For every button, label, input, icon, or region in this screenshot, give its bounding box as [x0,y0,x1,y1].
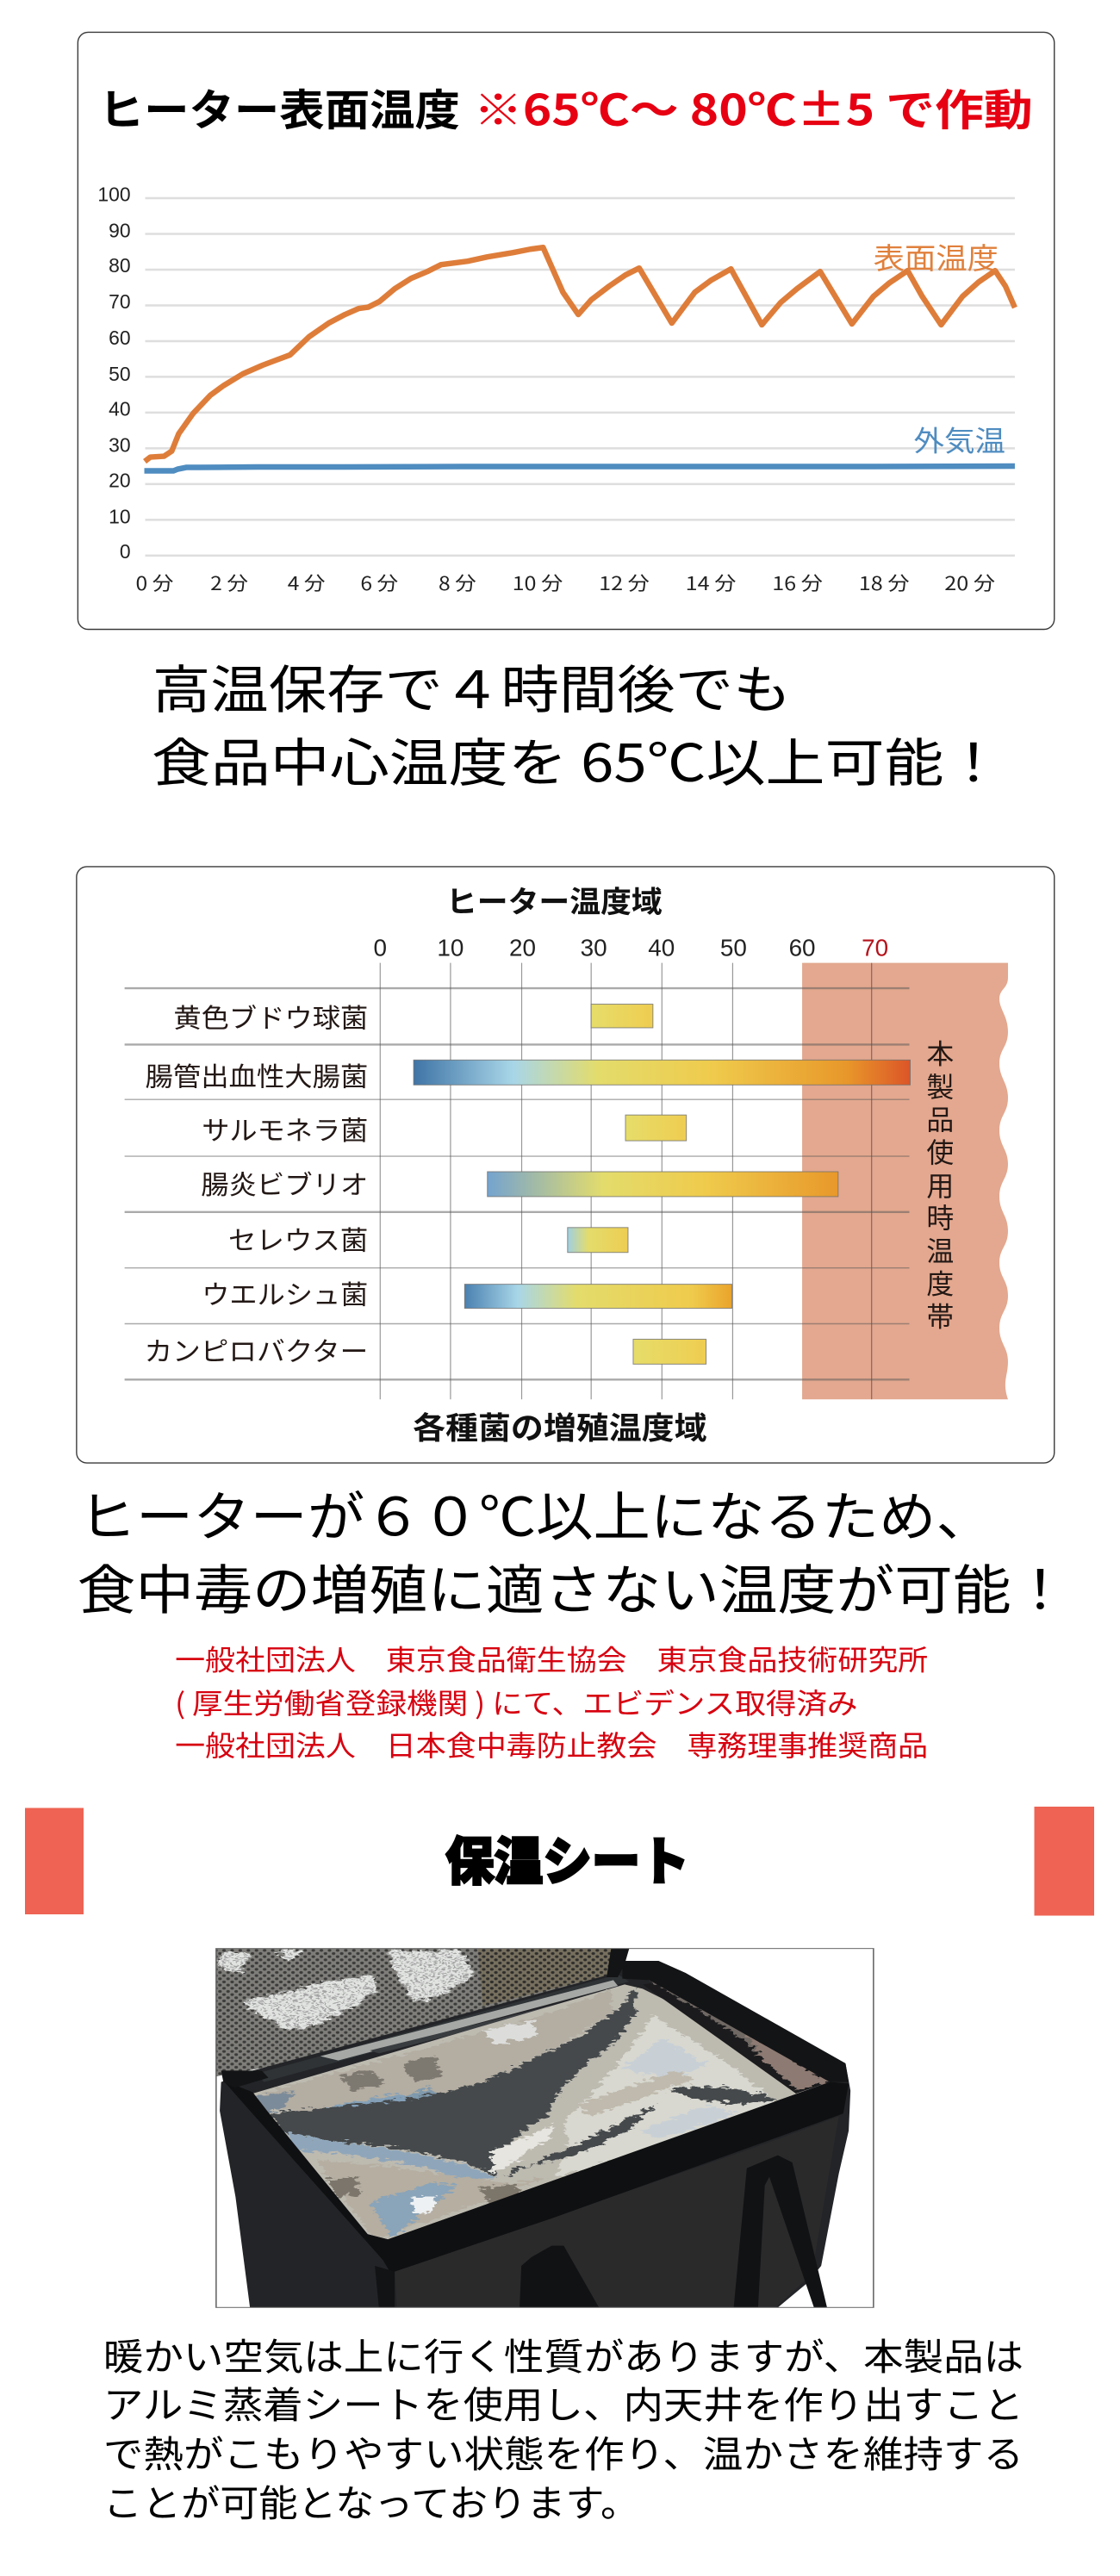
text: certification notes: ( 厚生労働省登録機関 ) にて、エビデンス取得済み [175,1682,858,1722]
text: keeps food core temperature above 65C: 高温保存で４時間後でも [152,650,792,724]
y-axis labels: 90 [109,219,131,241]
photo: insulated bag with foil lining [216,1949,874,2307]
product temperature band [802,963,1008,1399]
chart title: ※65℃～ 80℃±5 で作動 [474,77,1033,139]
text: above 60C not suitable for food poisoning growth: 食中毒の増殖に適さない温度が可能！ [78,1546,1069,1625]
bacteria names: サルモネラ菌 [202,1109,368,1148]
line: surface temperature [145,247,1015,462]
bag body [220,1961,850,2307]
temperature axis labels: 30 [581,935,607,961]
x-axis labels: 20 分 [944,569,995,596]
zipper bands [226,2083,383,2259]
y-axis labels: 80 [109,254,131,277]
paragraph: insulation sheet description: で熱がこもりやすい状態を作り、温かさを維持する [103,2425,1024,2479]
chart title: ヒーター表面温度 [99,77,460,139]
x-axis labels: 4 分 [288,569,326,596]
text: keeps food core temperature above 65C [152,650,1003,797]
paragraph: insulation sheet description [103,2328,1024,2528]
paragraph: insulation sheet description: 暖かい空気は上に行く性質がありますが、本製品は [103,2328,1024,2381]
bacteria names: 腸管出血性大腸菌 [146,1055,368,1093]
y-axis labels: 40 [109,398,131,420]
bacteria names: セレウス菌 [228,1219,368,1258]
handles [734,2156,827,2307]
dark foil reflection [269,1988,637,2177]
foil strip under lid [257,1975,629,2082]
heading: growth temperature range: 各種菌の増殖温度域 [413,1403,707,1448]
y-axis labels: 30 [109,434,131,457]
line label: outside air temperature: 外気温 [913,420,1005,460]
bacteria names: 黄色ブドウ球菌 [173,996,368,1035]
temperature axis labels: 60 [789,935,816,961]
y-axis labels: 50 [109,363,131,385]
text: certification notes [175,1638,928,1764]
temperature axis labels: 20 [509,935,536,961]
y-axis labels: 0 [120,540,131,563]
bacteria names: カンピロバクター [145,1329,368,1368]
heading: insulation sheet: 保温シート [445,1820,689,1895]
temperature axis labels: 10 [437,935,464,961]
x-axis labels: 2 分 [210,569,248,596]
x-axis labels: 14 分 [686,569,737,596]
left accent block [25,1808,84,1914]
panel: heater surface temperature chart [78,32,1055,630]
paragraph: insulation sheet description: アルミ蒸着シートを使用し、内天井を作り出すこと [103,2376,1024,2430]
bacteria names: 腸炎ビブリオ [201,1163,368,1202]
x-axis labels: 16 分 [772,569,823,596]
pale foil area [555,2016,775,2177]
temperature axis labels: 40 [648,935,675,961]
y-axis gridlines [146,198,1015,556]
text: keeps food core temperature above 65C: 食品中心温度を 65℃以上可能！ [152,723,1003,797]
right accent block [1034,1807,1094,1916]
growth range bars [414,1005,910,1364]
x-axis labels [136,569,995,596]
x-axis labels: 18 分 [859,569,910,596]
line label: surface temperature: 表面温度 [874,235,999,277]
chart title [99,77,1033,139]
y-axis labels: 20 [109,469,131,491]
y-axis labels [97,183,131,563]
panel: bacteria growth temperature chart [77,867,1055,1463]
y-axis labels: 70 [109,290,131,313]
x-axis labels: 12 分 [599,569,650,596]
temperature axis labels [374,935,888,961]
vertical label: product use temperature band: 本製品使用時温度帯 [926,1032,954,1335]
foil interior [252,1984,830,2239]
text: certification notes: 一般社団法人 日本食中毒防止教会 専務理事推奨商品 [175,1724,928,1764]
x-axis labels: 8 分 [439,569,476,596]
x-axis labels: 10 分 [513,569,563,596]
heading: heater temperature range: ヒーター温度域 [446,879,663,922]
right side foil wall [643,1983,830,2094]
paragraph: insulation sheet description: ことが可能となっております。 [103,2474,639,2528]
x-axis labels: 6 分 [360,569,398,596]
text: certification notes: 一般社団法人 東京食品衛生協会 東京食品技術研究所 [175,1638,928,1678]
temperature axis labels: 70 [862,935,888,961]
temperature axis labels: 50 [720,935,747,961]
bacteria names [145,996,368,1368]
y-axis labels: 10 [109,505,131,527]
temperature axis labels: 0 [374,935,387,961]
text: above 60C not suitable for food poisoning growth [78,1474,1069,1625]
lid inner mesh [216,1949,629,2076]
text: above 60C not suitable for food poisoning growth: ヒーターが６０℃以上になるため、 [79,1474,993,1552]
y-axis labels: 60 [109,327,131,349]
line: outside air temperature [145,466,1015,471]
x-axis labels: 0 分 [136,569,173,596]
y-axis labels: 100 [97,183,131,205]
bacteria names: ウエルシュ菌 [202,1273,368,1312]
